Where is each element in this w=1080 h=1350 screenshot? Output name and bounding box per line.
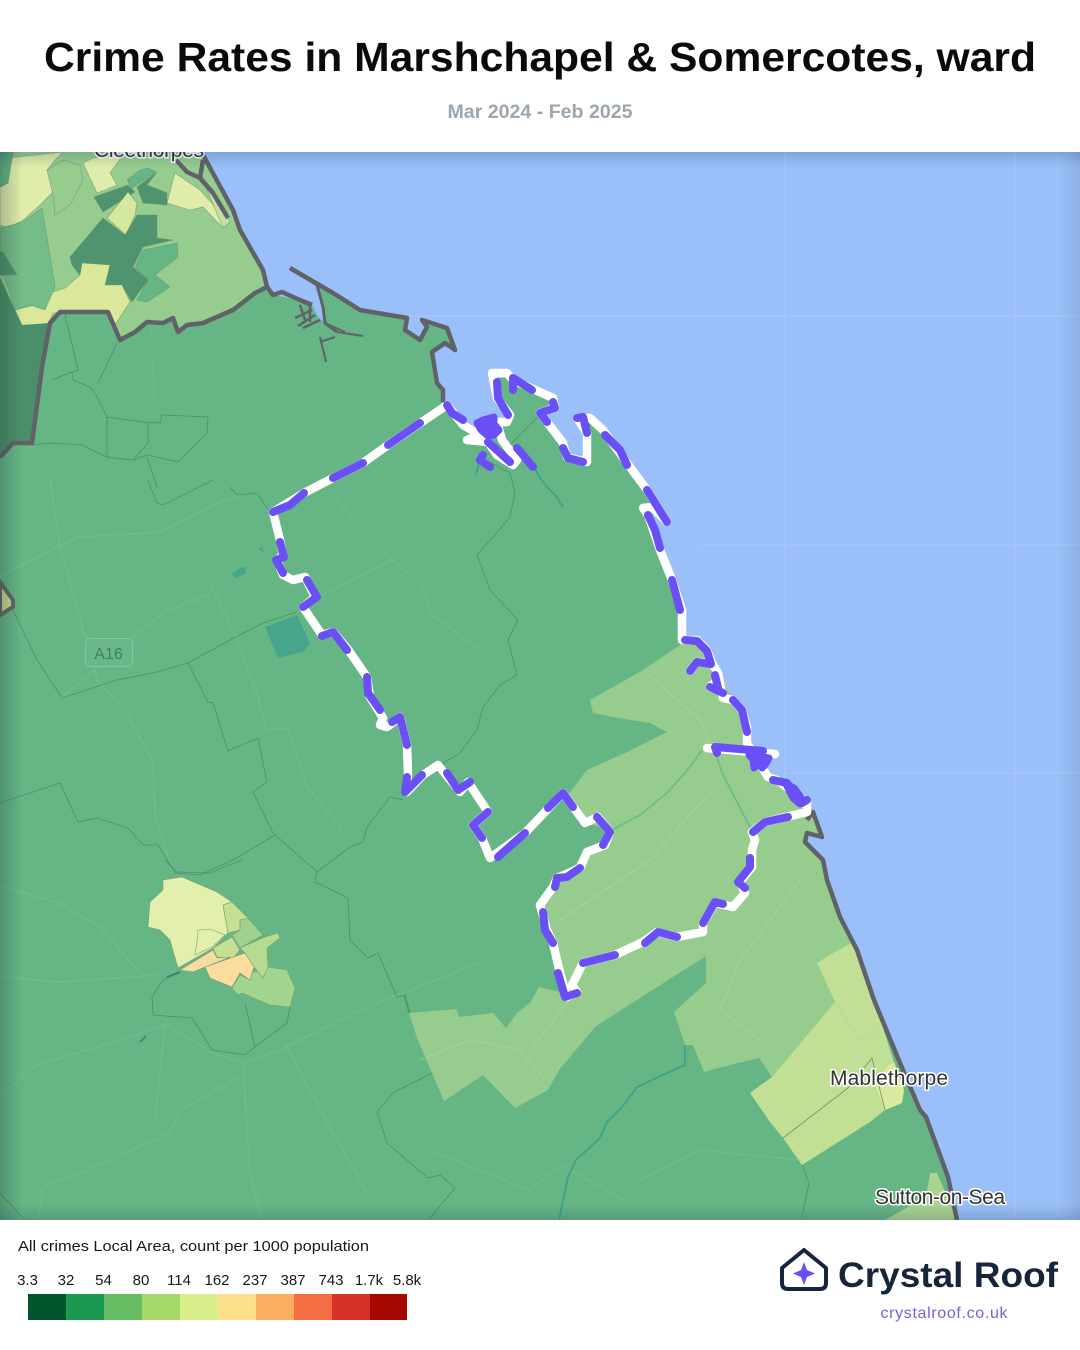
ponds [232, 547, 263, 578]
website: crystalroof.co.uk [880, 1305, 1008, 1322]
legend labels: 54 [95, 1272, 112, 1289]
region: Mablethorpe [750, 942, 904, 1165]
land: base green [0, 288, 953, 1220]
legend labels: 32 [58, 1272, 74, 1289]
logo: Crystal Roof [782, 1250, 1058, 1322]
ward boundary: purple dashes [273, 378, 807, 997]
ward boundaries [0, 315, 809, 1220]
legend labels: 237 [242, 1272, 268, 1289]
legend labels: 80 [133, 1272, 149, 1289]
road badge: A16 [86, 638, 132, 666]
legend labels: 387 [280, 1272, 306, 1289]
region: Grimsby and Cleethorpes light green base [0, 152, 267, 340]
region: western corner ward [0, 582, 13, 615]
title: Crime Rates in Marshchapel & Somercotes, ward [44, 34, 1036, 80]
region: Sutton-on-Sea [885, 1173, 957, 1220]
legend labels: 3.3 [17, 1272, 38, 1289]
reservoir [265, 615, 310, 658]
place label: Mablethorpe: Mablethorpe [830, 1067, 948, 1090]
coastline and district border [0, 155, 957, 1220]
region: Grimsby wards [0, 152, 230, 325]
road badge: A16: A16 [94, 646, 123, 663]
legend labels [17, 1272, 422, 1289]
legend labels: 114 [167, 1272, 191, 1289]
legend title: All crimes Local Area, count per 1000 population [18, 1238, 369, 1255]
rivers [140, 458, 750, 1220]
legend labels: 1.7k [355, 1272, 384, 1289]
map edge shadow [0, 152, 1080, 1220]
ward boundary: white outline [273, 373, 807, 997]
region: central, eastern and southern wards [409, 640, 853, 1108]
legend [17, 1238, 422, 1320]
wordmark: Crystal Roof [838, 1256, 1058, 1295]
subtitle: date range: Mar 2024 - Feb 2025 [448, 102, 633, 123]
region: left dark ward [0, 277, 50, 457]
legend labels: 743 [318, 1272, 344, 1289]
legend labels: 162 [204, 1272, 230, 1289]
ward boundary: overlapping segment clusters [477, 417, 803, 804]
legend labels: 5.8k [393, 1272, 422, 1289]
place label: Sutton-on-Sea: Sutton-on-Sea [875, 1186, 1005, 1209]
icon: house with sparkle [782, 1250, 826, 1289]
region: Louth [148, 877, 295, 1007]
legend colour scale [28, 1294, 407, 1320]
roads [59, 300, 800, 1172]
sea [204, 152, 1080, 1220]
place label: Cleethorpes: Cleethorpes [94, 139, 204, 162]
